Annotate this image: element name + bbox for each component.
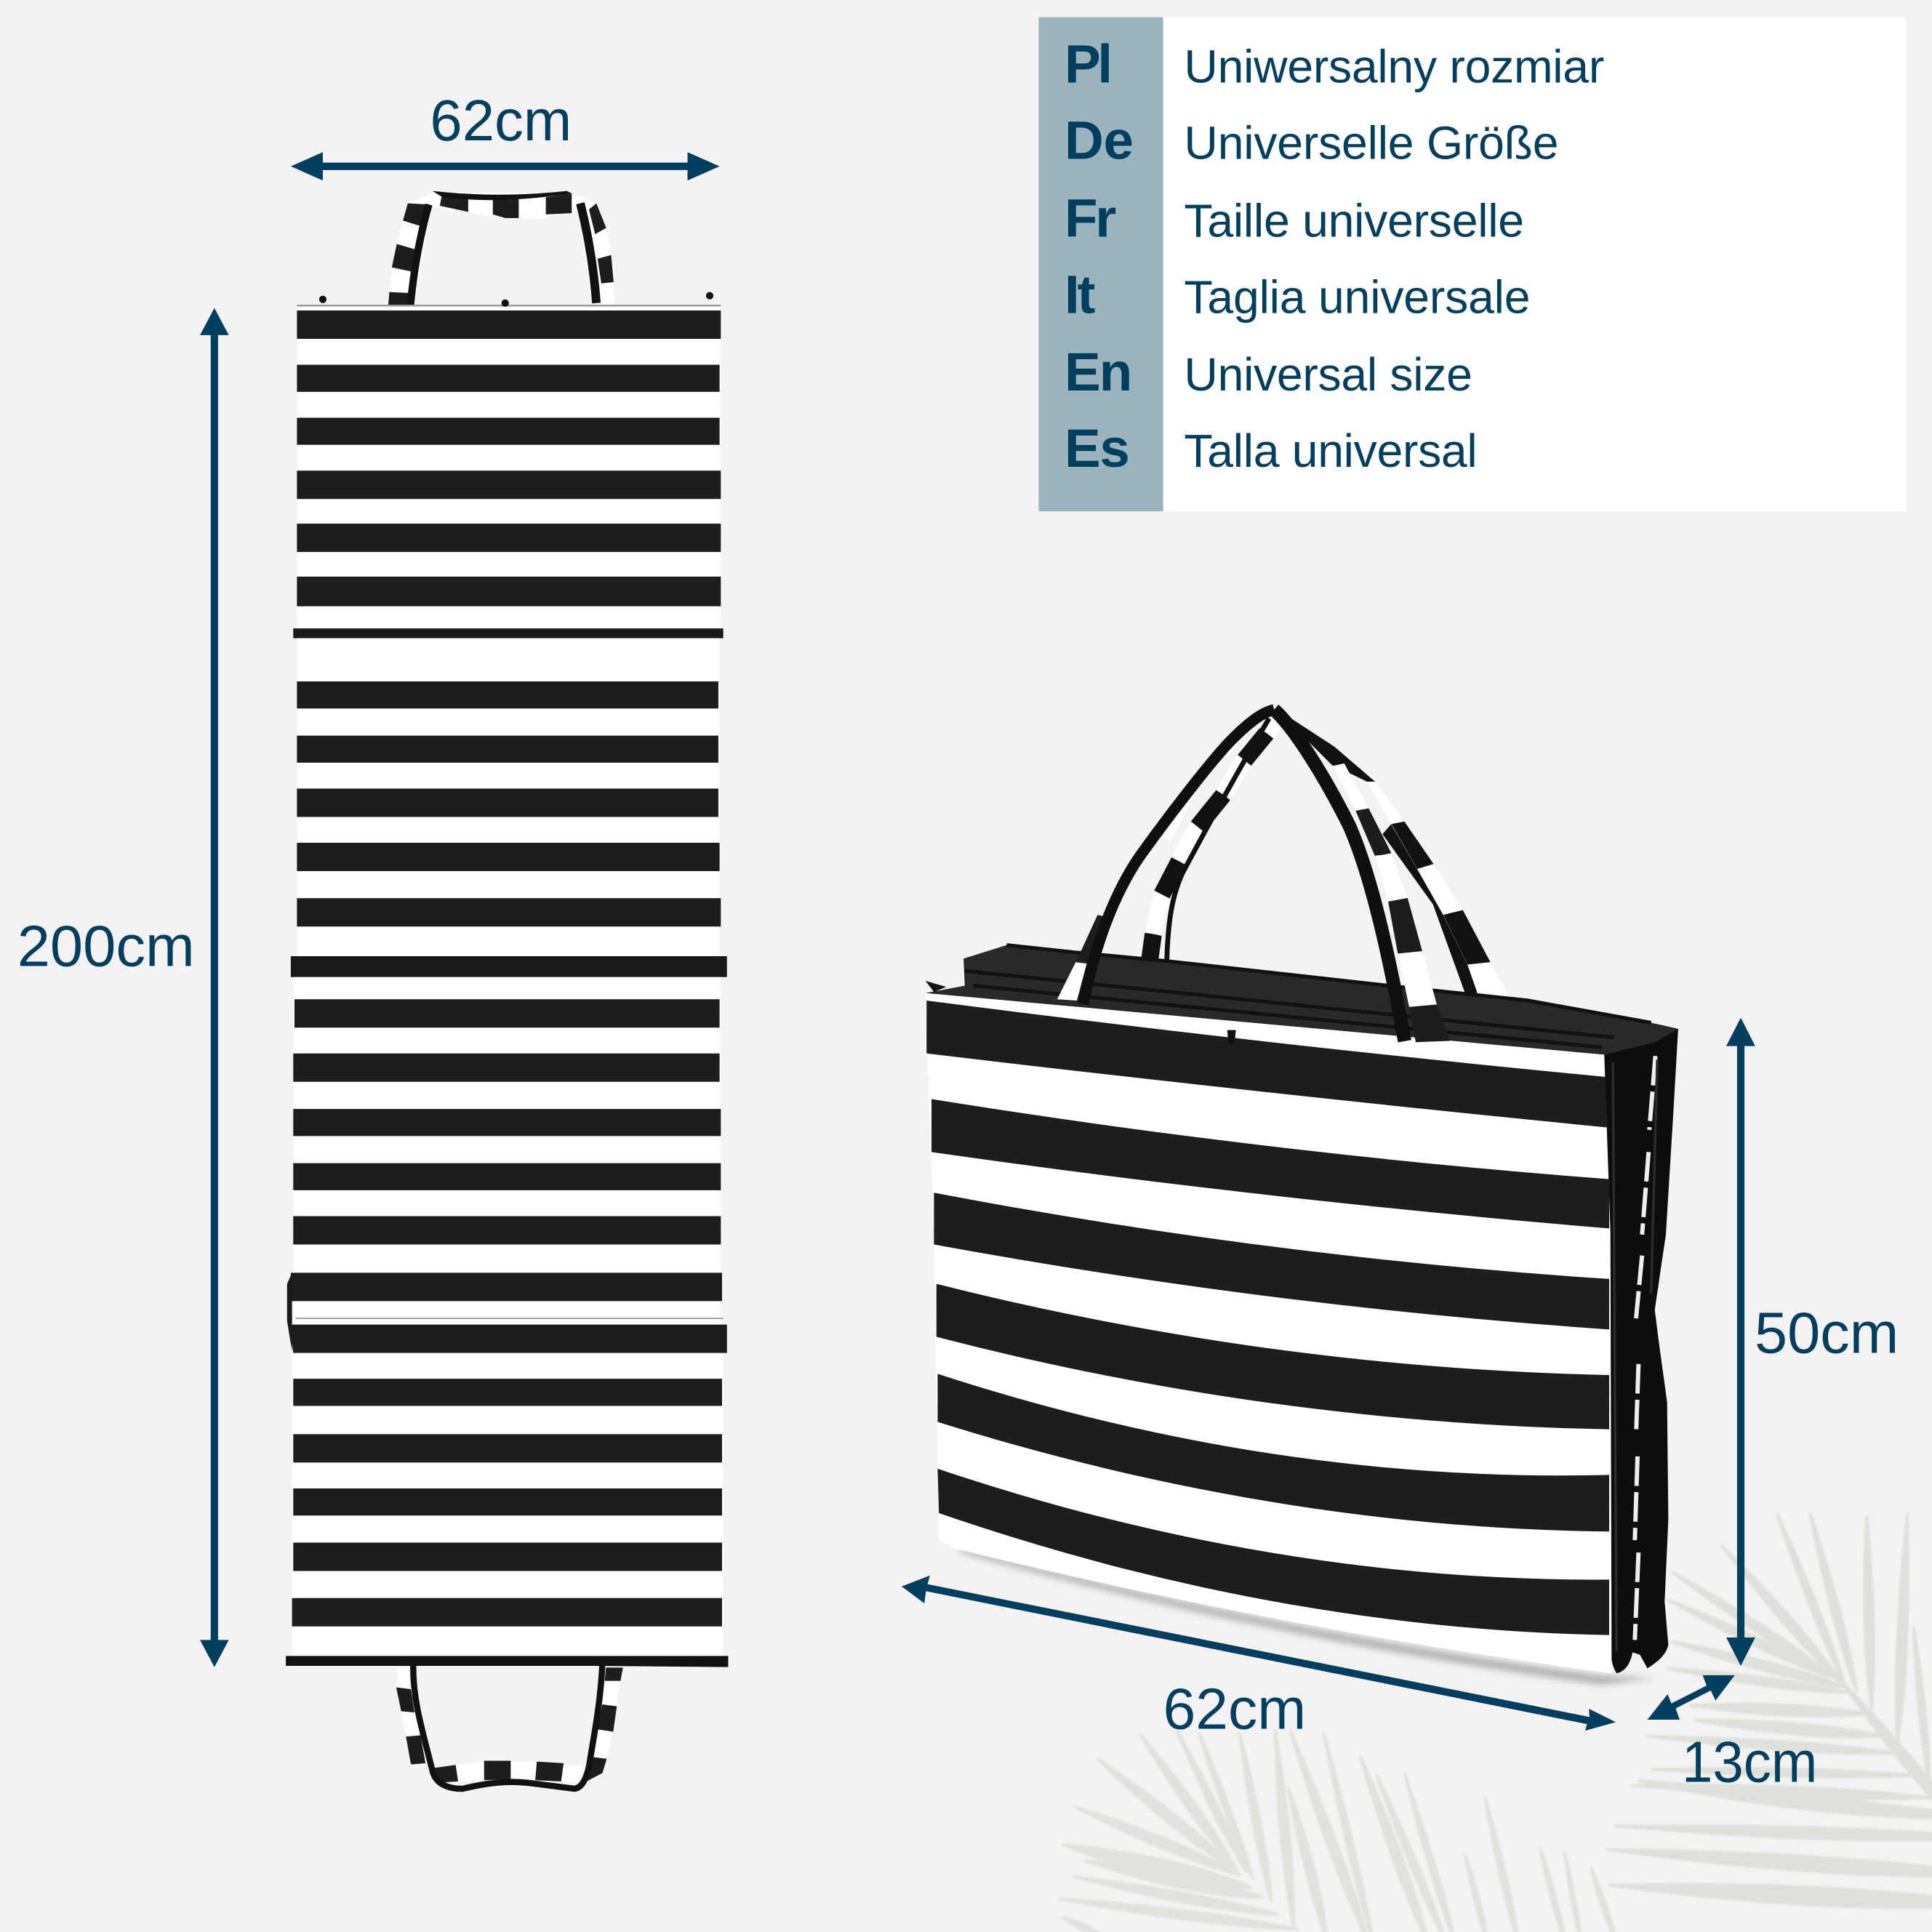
language code column: Fr — [1065, 188, 1116, 248]
top handle — [388, 191, 615, 307]
translations: Talla universal — [1184, 425, 1478, 477]
bag front left strap — [1057, 710, 1274, 1004]
bottom handle — [396, 1666, 623, 1789]
mat panel 1 — [293, 292, 724, 638]
flat mat product — [286, 191, 728, 1789]
decoration: palm frond right — [1606, 1513, 1932, 1908]
bag top mesh — [926, 945, 1678, 1062]
dimension: bag width 62cm — [902, 1576, 1616, 1741]
folded bag product — [926, 710, 1678, 1684]
dimension: width 62cm top — [291, 88, 720, 180]
bag ground shadow — [961, 1547, 1657, 1684]
translations: Uniwersalny rozmiar — [1184, 41, 1604, 93]
language code column — [1038, 17, 1163, 511]
mat panel 4 — [286, 1325, 728, 1667]
bag front face — [926, 981, 1611, 1673]
language code column: It — [1065, 264, 1095, 324]
bag back left strap — [1150, 718, 1277, 961]
language code column: Pl — [1065, 34, 1113, 95]
bag back right strap — [1281, 712, 1510, 998]
dimension: depth 13cm — [1648, 1675, 1817, 1794]
dimension: depth 13cm: 13cm — [1682, 1729, 1817, 1794]
translations: Taille universelle — [1184, 194, 1524, 246]
language code column: Es — [1065, 418, 1130, 478]
translations — [1184, 41, 1604, 477]
language code column: De — [1065, 111, 1134, 171]
size table panel — [1038, 17, 1906, 511]
translations: Universelle Größe — [1184, 117, 1559, 169]
language code column: En — [1065, 342, 1132, 402]
translations: Universal size — [1184, 348, 1472, 401]
dimension: width 62cm top: 62cm — [430, 88, 572, 153]
bag front right strap — [1274, 710, 1450, 1042]
mat panel 3 — [287, 977, 724, 1352]
dimension: bag width 62cm: 62cm — [1163, 1676, 1306, 1741]
dimension: height 50cm: 50cm — [1755, 1301, 1899, 1366]
translations: Taglia universale — [1184, 270, 1531, 323]
mat panel 2 — [291, 638, 727, 977]
decoration: palm frond bottom — [1059, 1730, 1618, 1932]
dimension: length 200cm — [17, 308, 229, 1667]
dimension: height 50cm — [1726, 1018, 1899, 1666]
dimension: length 200cm: 200cm — [17, 914, 195, 979]
bag side gusset — [1604, 1029, 1678, 1673]
